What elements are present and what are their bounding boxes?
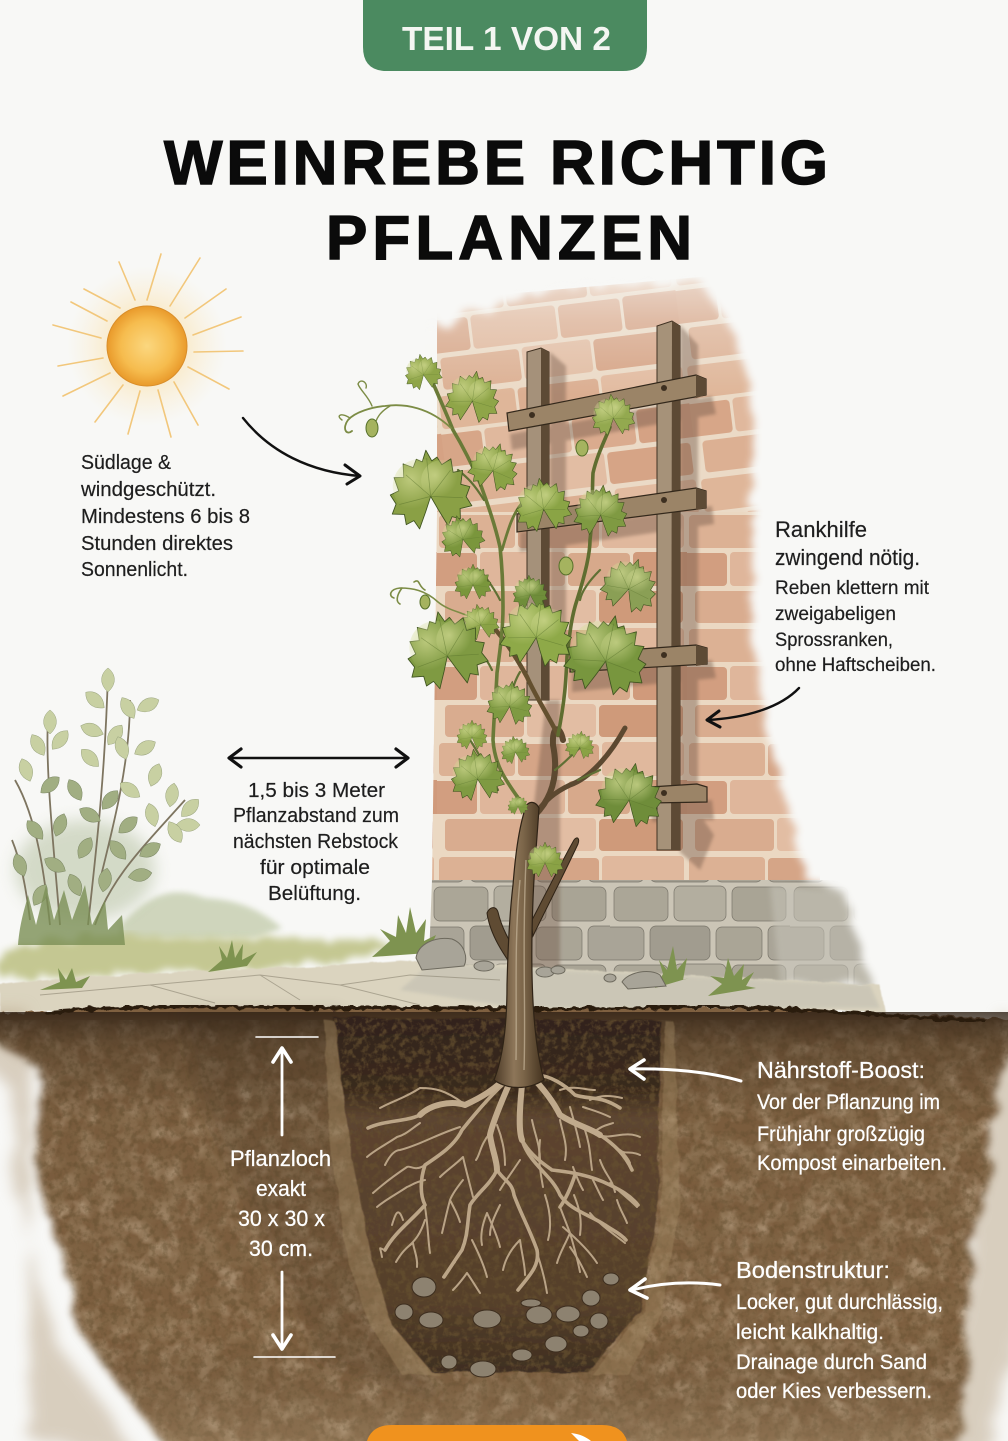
woody branches and green shoots xyxy=(339,381,625,818)
text: soil structure: Drainage durch Sand xyxy=(736,1351,927,1374)
dimension marker: planting hole depth xyxy=(254,1037,335,1357)
vine leaves xyxy=(366,351,667,877)
roots xyxy=(367,1072,640,1293)
crossbar 4 xyxy=(650,784,707,803)
text: sun location: Stunden direktes xyxy=(81,533,233,555)
text: climbing support xyxy=(775,517,936,676)
upper tilted brick courses xyxy=(437,278,760,512)
text: sun location: Mindestens 6 bis 8 xyxy=(81,506,250,528)
text: planting hole: exakt xyxy=(256,1176,306,1201)
crossbar 1 xyxy=(507,375,706,431)
text: plant spacing: Pflanzabstand zum xyxy=(233,805,399,827)
brick wall with trellis xyxy=(425,270,880,985)
text: soil structure: oder Kies verbessern. xyxy=(736,1380,932,1403)
arrow: sun to vine xyxy=(243,418,360,484)
title: PFLANZEN xyxy=(326,204,692,273)
soil body xyxy=(0,1008,1008,1441)
text: plant spacing xyxy=(233,780,399,905)
arrow: plant spacing xyxy=(229,749,408,767)
text: soil structure xyxy=(736,1257,943,1403)
text: plant spacing: 1,5 bis 3 Meter xyxy=(248,780,385,802)
text: climbing support: zweigabeligen xyxy=(775,604,896,625)
grass band xyxy=(0,935,400,978)
next-page button, cropped at bottom xyxy=(367,1425,627,1441)
text: sun location: Sonnenlicht. xyxy=(81,559,188,581)
text: climbing support: zwingend nötig. xyxy=(775,545,920,570)
pale watercolour fringe xyxy=(0,1010,1008,1441)
text: sun location: Südlage & xyxy=(81,452,172,474)
grapevine trunk and stems xyxy=(339,381,625,1087)
grass tufts xyxy=(40,907,756,996)
crossbar 2 xyxy=(517,488,706,532)
ground surface with paving xyxy=(0,892,885,1012)
paving xyxy=(0,960,885,1012)
rocks at bottom of the pit xyxy=(395,1273,619,1377)
badge: part 1 of 2: TEIL 1 VON 2 xyxy=(402,20,611,57)
lower brick courses xyxy=(432,512,820,882)
rocks on the ground xyxy=(416,938,666,989)
dark top edge of soil xyxy=(45,1006,985,1021)
text: planting hole: 30 cm. xyxy=(249,1236,313,1261)
text: sun location: windgeschützt. xyxy=(80,479,216,501)
distant shrubs xyxy=(120,892,282,940)
text: climbing support: Reben klettern mit xyxy=(775,578,930,599)
crossbar 3 xyxy=(570,645,707,672)
text: planting hole xyxy=(230,1146,331,1261)
title: WEINREBE RICHTIG xyxy=(164,129,828,198)
text: sun location xyxy=(80,452,250,581)
soil cross-section xyxy=(0,1006,1008,1441)
trellis shadows xyxy=(510,325,716,980)
text: plant spacing: nächsten Rebstock xyxy=(233,831,399,853)
trellis post left xyxy=(527,348,549,700)
text: plant spacing: für optimale xyxy=(260,857,370,879)
soil rim next to the pit xyxy=(324,1020,680,1375)
main trunk xyxy=(494,802,544,1088)
text: planting hole: 30 x 30 x xyxy=(238,1206,325,1231)
top fade xyxy=(437,278,742,374)
stone base xyxy=(428,880,880,985)
text: nutrient boost xyxy=(757,1057,947,1175)
text: climbing support: ohne Haftscheiben. xyxy=(775,655,936,676)
text: climbing support: Sprossranken, xyxy=(775,630,893,651)
text: nutrient boost: Nährstoff-Boost: xyxy=(757,1057,925,1083)
soil fill of planting pit xyxy=(334,1018,660,1372)
cut side shoot and lower branch xyxy=(487,838,579,972)
arrow: soil structure xyxy=(630,1279,720,1298)
title xyxy=(164,129,828,273)
text: climbing support: Rankhilfe xyxy=(775,517,867,542)
text: planting hole: Pflanzloch xyxy=(230,1146,331,1171)
text: plant spacing: Belüftung. xyxy=(268,883,361,905)
text: nutrient boost: Kompost einarbeiten. xyxy=(757,1152,947,1175)
text: soil structure: Locker, gut durchlässig, xyxy=(736,1291,943,1314)
text: soil structure: leicht kalkhaltig. xyxy=(736,1321,884,1344)
arrow: nutrient boost xyxy=(630,1060,741,1081)
bush on the left xyxy=(10,668,203,945)
text: nutrient boost: Frühjahr großzügig xyxy=(757,1123,925,1146)
badge: part 1 of 2 xyxy=(363,0,647,71)
wall masonry xyxy=(425,270,880,985)
trellis post right xyxy=(657,321,680,850)
arrow: to trellis xyxy=(707,688,799,727)
icon: white arrow tip xyxy=(571,1433,591,1441)
text: nutrient boost: Vor der Pflanzung im xyxy=(757,1091,940,1114)
icon: sun with rays xyxy=(53,254,243,437)
text: soil structure: Bodenstruktur: xyxy=(736,1257,890,1283)
